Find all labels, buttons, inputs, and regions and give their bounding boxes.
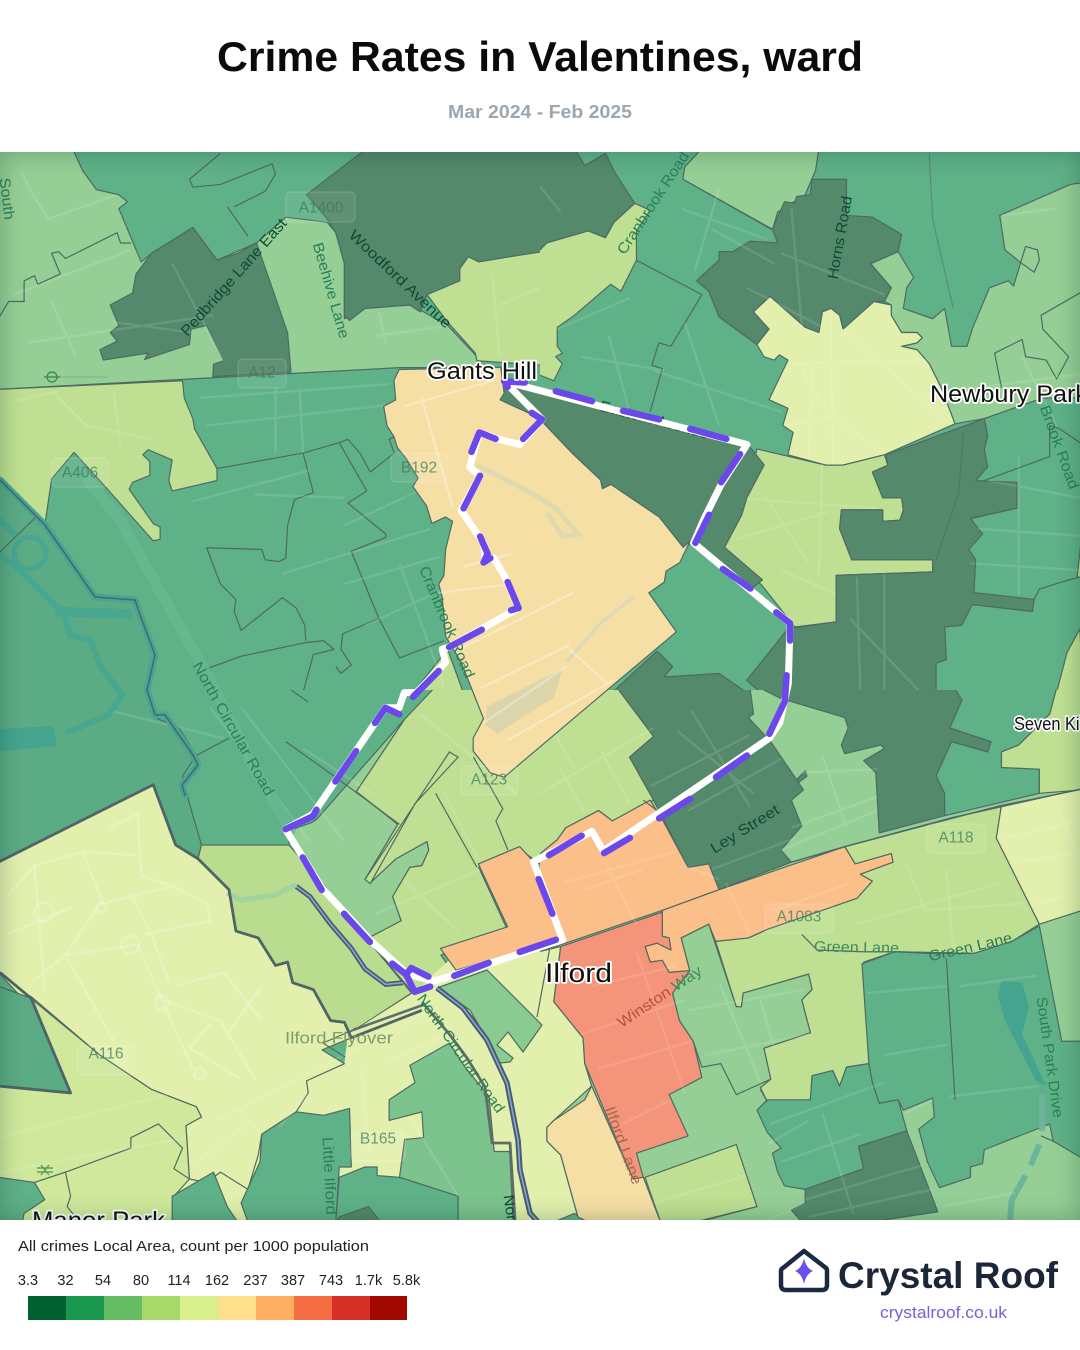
logo: Crystal Roof [781,1251,1059,1322]
legend value labels: 237 [243,1273,268,1289]
map tile: north-west areas [0,152,540,690]
icon: rail station [37,1165,53,1175]
road name labels: Horns Road [825,195,856,280]
map tile: north-east areas [540,152,1080,690]
area east of North Circular Road [437,970,542,1063]
road number badges: A1083 [777,908,821,926]
legend value labels: 387 [281,1273,305,1289]
road name labels: Cranbrook Road [614,149,693,258]
legend value labels: 54 [95,1273,111,1289]
map tile: south-east areas [540,690,1080,1220]
road name labels: Ilford Lane [601,1104,645,1187]
title: Crime Rates in Valentines, ward [217,33,863,80]
road number badges [52,192,985,1161]
legend value labels: 3.3 [18,1273,38,1289]
subtitle: date range: Mar 2024 - Feb 2025 [448,102,632,122]
forest park water features [0,480,290,830]
sand high-crime area [384,367,690,777]
road name labels: Little Ilford [319,1137,340,1215]
legend value labels [18,1273,421,1289]
website address: crystalroof.co.uk [880,1304,1008,1322]
place name labels: Gants Hill [427,358,537,385]
road number badges: A118 [938,830,974,846]
road name labels: Winston Way [614,962,705,1031]
road number badges: A1400 [299,200,344,216]
road number badges: B165 [360,1130,396,1148]
place name labels [32,358,1080,1235]
legend [18,1239,421,1320]
dark wedge area north-east of the ward [500,381,764,589]
legend value labels: 743 [319,1273,343,1289]
road name labels: North Circular Road [189,659,277,799]
legend colour scale [28,1296,407,1320]
road number badges: A116 [88,1046,124,1062]
legend value labels: 5.8k [393,1273,421,1289]
icon: tube station [44,372,108,382]
road name labels: Green Lane [927,930,1014,965]
legend value labels: 114 [167,1273,191,1289]
ward boundary: Valentines [282,378,794,996]
North Circular road and river [323,947,550,1222]
place name labels: Newbury Park [930,381,1080,408]
orange area west of Ilford [440,847,563,970]
road name labels: North Circular Road [413,991,508,1116]
legend value labels: 1.7k [355,1273,383,1289]
map tile: central ward areas [383,366,765,971]
road name labels: Beehive Lane [309,241,352,341]
road number badges: A123 [471,772,507,788]
road name labels: Ilford Flyover [285,1028,393,1048]
logo wordmark: Crystal Roof [838,1255,1059,1296]
place name labels: Ilford [545,958,612,988]
road name labels: North Circular Road [500,1194,536,1335]
road name labels: Eastern Avenue [598,398,710,443]
legend value labels: 162 [205,1273,229,1289]
road name labels: Cranbrook Road [415,564,478,681]
road name labels: Green Lane [814,939,899,957]
legend value labels: 32 [57,1273,74,1289]
road name labels: Woodford Avenue [345,227,455,332]
legend title: All crimes Local Area, count per 1000 population [18,1239,369,1255]
road number badges: A12 [248,364,276,382]
road name labels: Brook Road [1036,403,1080,492]
map tile: south-west areas [0,690,540,1220]
road name labels: Ley Street [707,801,783,857]
road name labels: Pedbridge Lane East [178,215,291,340]
road number badges: B192 [401,460,437,476]
legend value labels: 80 [133,1273,149,1289]
road name labels: South Park Drive [1033,996,1066,1119]
place name labels: Manor Park [32,1207,166,1235]
road number badges: A406 [62,464,98,482]
icon: house with star [781,1251,827,1290]
